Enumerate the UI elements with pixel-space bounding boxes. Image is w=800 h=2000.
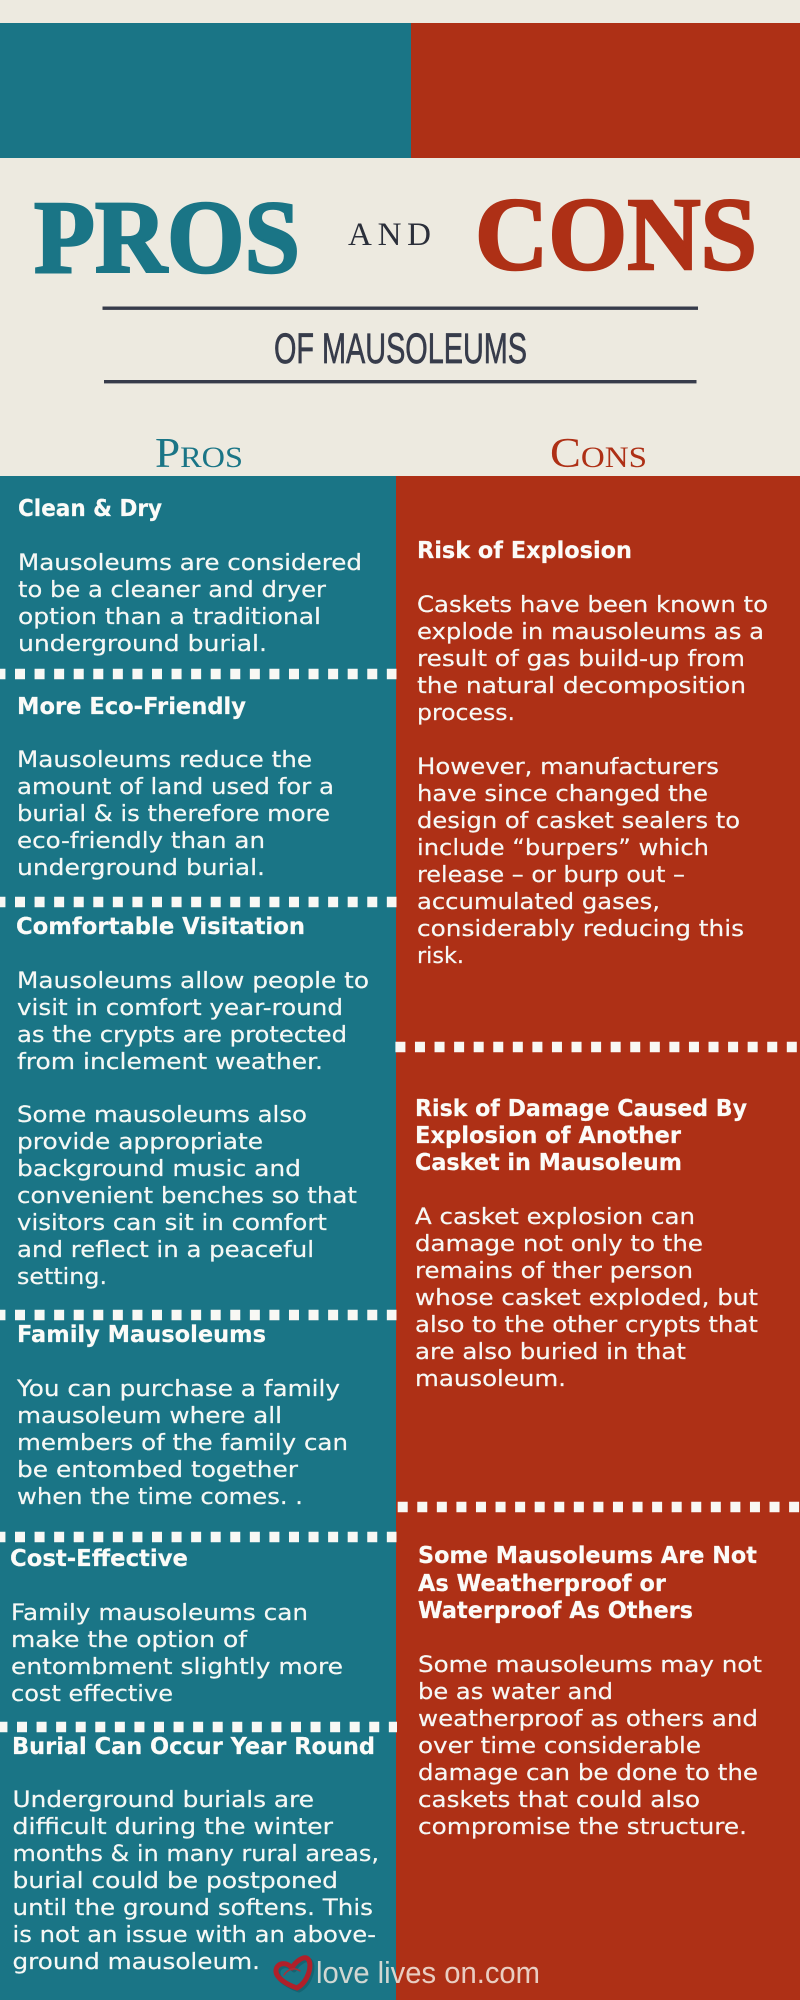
- pro: clean and dry: Clean & Dry: [18, 496, 162, 522]
- pro: burial can occur year round: Burial Can Occur Year Round: [12, 1734, 375, 1760]
- con: risk of explosion: process.: [417, 700, 515, 726]
- pro: cost-effective: Family mausoleums can: [11, 1600, 308, 1626]
- column heading: cons: CONS: [550, 431, 647, 477]
- pro: burial can occur year round: [12, 1734, 379, 1975]
- pro: family mausoleums: Family Mausoleums: [17, 1322, 266, 1348]
- title word: cons: CONS: [475, 177, 757, 292]
- con: risk of damage: Casket in Mausoleum: [415, 1150, 682, 1176]
- pro: family mausoleums: be entombed together: [17, 1457, 299, 1483]
- pro: burial can occur year round: difficult during the winter: [12, 1814, 334, 1840]
- subtitle with rules: OF MAUSOLEUMS: [274, 325, 527, 373]
- pro: cost-effective: Cost-Effective: [10, 1546, 188, 1572]
- con: weatherproof: compromise the structure.: [418, 1814, 747, 1840]
- pro: family mausoleums: [16, 1322, 348, 1510]
- pro: family mausoleums: You can purchase a family: [16, 1376, 340, 1402]
- con: risk of damage: whose casket exploded, but: [415, 1285, 758, 1311]
- pro: burial can occur year round: burial could be postponed: [12, 1868, 338, 1894]
- con: risk of damage: A casket explosion can: [415, 1204, 695, 1230]
- con: risk of damage: Risk of Damage Caused By: [415, 1096, 747, 1122]
- pro: comfortable visitation: provide appropriate: [17, 1129, 263, 1155]
- pro: burial can occur year round: Underground burials are: [12, 1787, 314, 1813]
- con: risk of explosion: Caskets have been known to: [417, 592, 768, 618]
- pro: clean and dry: underground burial.: [18, 631, 267, 657]
- pro: more eco-friendly: amount of land used for a: [17, 774, 334, 800]
- con: risk of damage: damage not only to the: [415, 1231, 703, 1257]
- con: risk of damage: also to the other crypts that: [415, 1312, 758, 1338]
- con: risk of explosion: design of casket sealers to: [417, 808, 740, 834]
- pro: more eco-friendly: underground burial.: [17, 855, 265, 881]
- pro: clean and dry: Mausoleums are considered: [18, 550, 362, 576]
- con: weatherproof: caskets that could also: [418, 1787, 700, 1813]
- pro: comfortable visitation: from inclement weather.: [17, 1049, 323, 1075]
- pro: cost-effective: entombment slightly more: [11, 1654, 343, 1680]
- con: risk of explosion: include “burpers” which: [417, 835, 709, 861]
- con: risk of damage: mausoleum.: [415, 1366, 566, 1392]
- con: weatherproof: Waterproof As Others: [418, 1598, 693, 1624]
- column heading: pros: PROS: [155, 431, 243, 477]
- top colour band: [0, 23, 800, 158]
- pro: clean and dry: [18, 496, 362, 657]
- pro: comfortable visitation: convenient benches so that: [17, 1183, 357, 1209]
- pro: comfortable visitation: visitors can sit in comfort: [17, 1210, 327, 1236]
- pro: family mausoleums: members of the family can: [17, 1430, 348, 1456]
- logo: love lives on: love lives on.com: [316, 1955, 540, 1990]
- pro: cost-effective: [10, 1546, 343, 1707]
- pro: family mausoleums: when the time comes. .: [17, 1484, 303, 1510]
- pro: comfortable visitation: Comfortable Visitation: [16, 914, 305, 940]
- title word: pros: PROS: [34, 180, 300, 295]
- pro: comfortable visitation: background music and: [17, 1156, 301, 1182]
- con: risk of damage: remains of ther person: [415, 1258, 693, 1284]
- con: risk of explosion: result of gas build-up from: [417, 646, 745, 672]
- con: weatherproof: be as water and: [418, 1679, 613, 1705]
- pro: more eco-friendly: [17, 694, 334, 881]
- pro: comfortable visitation: as the crypts are protected: [17, 1022, 347, 1048]
- pro: more eco-friendly: More Eco-Friendly: [17, 694, 246, 720]
- pro: burial can occur year round: months & in many rural areas,: [12, 1841, 379, 1867]
- con: risk of explosion: Risk of Explosion: [417, 538, 632, 564]
- con: weatherproof: As Weatherproof or: [418, 1571, 667, 1597]
- con: risk of explosion: considerably reducing this: [417, 916, 744, 942]
- pro: burial can occur year round: until the ground softens. This: [12, 1895, 373, 1921]
- pro: clean and dry: option than a traditional: [18, 604, 321, 630]
- pro: cost-effective: cost effective: [11, 1681, 173, 1707]
- pro: comfortable visitation: setting.: [17, 1264, 107, 1290]
- con: risk of damage: Explosion of Another: [415, 1123, 682, 1149]
- pro: burial can occur year round: is not an issue with an above-: [12, 1922, 376, 1948]
- panel: cons background: [396, 476, 800, 2000]
- con: weatherproof: Some mausoleums may not: [418, 1652, 762, 1678]
- con: risk of explosion: release – or burp out –: [417, 862, 685, 888]
- pro: clean and dry: to be a cleaner and dryer: [18, 577, 327, 603]
- con: risk of explosion: accumulated gases,: [417, 889, 660, 915]
- title word: and: AND: [348, 217, 431, 253]
- con: risk of explosion: explode in mausoleums as a: [417, 619, 764, 645]
- pro: more eco-friendly: Mausoleums reduce the: [17, 747, 312, 773]
- pro: comfortable visitation: Mausoleums allow people to: [17, 968, 369, 994]
- con: weatherproof: damage can be done to the: [418, 1760, 758, 1786]
- title: [34, 177, 757, 295]
- pro: comfortable visitation: visit in comfort year-round: [17, 995, 343, 1021]
- con: risk of explosion: risk.: [417, 943, 464, 969]
- con: weatherproof: [418, 1543, 762, 1840]
- pro: comfortable visitation: and reflect in a peaceful: [17, 1237, 314, 1263]
- con: risk of explosion: have since changed the: [417, 781, 708, 807]
- con: weatherproof: over time considerable: [418, 1733, 701, 1759]
- pro: burial can occur year round: ground mausoleum.: [12, 1949, 260, 1975]
- subtitle with rules: [102, 306, 698, 383]
- con: weatherproof: weatherproof as others and: [418, 1706, 758, 1732]
- pro: more eco-friendly: eco-friendly than an: [17, 828, 265, 854]
- con: risk of explosion: However, manufacturers: [417, 754, 719, 780]
- con: risk of explosion: [417, 538, 768, 969]
- panel: pros background: [0, 476, 396, 2000]
- pro: comfortable visitation: [16, 914, 369, 1290]
- con: risk of damage: [415, 1096, 758, 1392]
- con: weatherproof: Some Mausoleums Are Not: [418, 1543, 757, 1569]
- con: risk of explosion: the natural decomposition: [417, 673, 746, 699]
- pro: cost-effective: make the option of: [11, 1627, 248, 1653]
- pro: comfortable visitation: Some mausoleums also: [17, 1102, 307, 1128]
- icon: heart: [276, 1958, 312, 1990]
- pro: more eco-friendly: burial & is therefore more: [17, 801, 330, 827]
- con: risk of damage: are also buried in that: [415, 1339, 686, 1365]
- pro: family mausoleums: mausoleum where all: [17, 1403, 282, 1429]
